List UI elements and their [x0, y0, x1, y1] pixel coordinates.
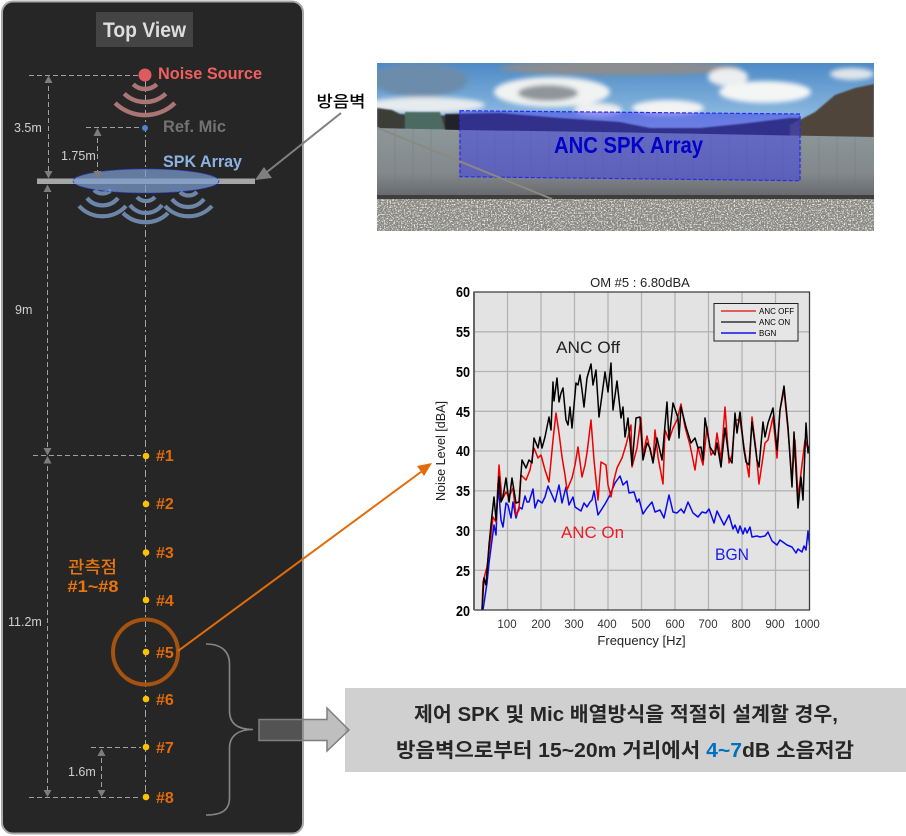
callout: conclusion box: 제어 SPK 및 Mic 배열방식을 적절히 설계할 경우,	[414, 703, 838, 726]
observation points #1 to #8: #7	[156, 740, 174, 757]
annotation: BGN: BGN	[715, 546, 749, 564]
observation points #1 to #8: #8	[156, 790, 174, 807]
chart legend	[714, 304, 798, 341]
chart: noise level versus frequency	[434, 275, 820, 648]
x-axis tick labels: 100	[497, 619, 517, 631]
x-axis tick labels: 200	[531, 619, 551, 631]
dimension: 9m: 9m	[15, 303, 32, 317]
x-axis tick labels: 700	[698, 619, 718, 631]
barrier wall	[377, 128, 874, 198]
dimension: 1.75m	[61, 128, 141, 179]
observation points #1 to #8: #5	[156, 645, 174, 662]
dimension: 3.5m	[14, 76, 141, 178]
callout line crossing photo	[377, 126, 552, 200]
dimension: 1.6m	[68, 748, 141, 797]
arrow: point #5 to chart	[178, 463, 432, 651]
series: black curve	[482, 363, 810, 610]
centre axis line	[144, 80, 146, 800]
noise barrier and SPK array ellipse	[37, 169, 255, 193]
observation points #1 to #8: #1	[156, 448, 174, 465]
chart title: OM #5 : 6.80dBA	[590, 275, 690, 290]
photo: noise barrier with ANC speaker array	[341, 61, 874, 231]
label: SPK Array: SPK Array	[163, 152, 243, 171]
icon: reference microphone	[142, 125, 148, 131]
y-axis tick labels: 30	[456, 523, 470, 540]
heading: Top View	[96, 12, 193, 47]
dimension: 1.75m: 1.75m	[61, 149, 96, 163]
x-axis tick labels: 300	[564, 619, 584, 631]
overlay: ANC SPK Array	[460, 111, 800, 181]
series: red curve	[482, 390, 809, 610]
y-axis tick labels: 35	[456, 483, 470, 500]
dimension: 11.2m: 11.2m	[8, 615, 42, 629]
y-axis tick labels: 25	[456, 563, 470, 580]
plot frame	[474, 292, 810, 610]
chart legend: ANC OFF	[759, 307, 794, 316]
y-axis tick labels: 20	[456, 603, 470, 620]
y-axis tick labels: 60	[456, 284, 470, 301]
label: ANC SPK Array: ANC SPK Array	[554, 132, 703, 158]
label: 방음벽: 방음벽	[316, 88, 366, 112]
observation points #1 to #8: #4	[156, 593, 174, 610]
dimension: 1.6m: 1.6m	[68, 765, 96, 779]
clouds	[365, 61, 874, 117]
y-axis tick labels: 40	[456, 443, 470, 460]
arrow: wall to SPK array callout	[255, 113, 341, 180]
dimension: 11.2m	[8, 456, 141, 798]
label: observation points group: 관측점	[68, 558, 117, 577]
observation points #1 to #8	[143, 448, 174, 807]
y-axis title: Noise Level [dBA]	[434, 401, 448, 501]
x-axis tick labels: 900	[765, 619, 785, 631]
sky	[377, 63, 874, 143]
heading: Top View: Top View	[103, 19, 187, 42]
x-axis tick labels: 500	[631, 619, 651, 631]
observation points #1 to #8: #6	[156, 692, 174, 709]
annotation: ANC Off: ANC Off	[556, 338, 620, 357]
label: Ref. Mic: Ref. Mic	[163, 117, 226, 136]
icon: noise source with sound waves	[115, 68, 175, 115]
y-axis tick labels: 50	[456, 364, 470, 381]
y-axis tick labels: 45	[456, 404, 470, 421]
dimension: 3.5m: 3.5m	[14, 121, 42, 135]
annotation: ANC On: ANC On	[561, 524, 624, 542]
callout: conclusion box: 방음벽으로부터 15~20m 거리에서 4~7dB 소음저감	[396, 739, 854, 762]
plot background	[474, 292, 810, 610]
panel: top view diagram	[2, 2, 303, 834]
x-axis title: Frequency [Hz]	[597, 633, 686, 648]
gravel ground	[377, 199, 874, 231]
x-axis tick labels: 600	[665, 619, 685, 631]
callout: conclusion box	[345, 688, 906, 772]
block arrow: brace to conclusion	[259, 708, 349, 751]
brace: points #5 to #8	[206, 644, 253, 815]
icon: speaker array sound waves	[79, 190, 212, 222]
observation points #1 to #8: #2	[156, 496, 174, 513]
x-axis tick labels	[497, 619, 820, 631]
label: Noise Source: Noise Source	[158, 64, 262, 83]
tree line	[377, 84, 874, 138]
chart legend: ANC ON	[759, 318, 790, 327]
y-axis tick labels: 55	[456, 324, 470, 341]
chart legend: BGN	[759, 329, 777, 338]
observation points #1 to #8: #3	[156, 545, 174, 562]
x-axis tick labels: 400	[597, 619, 617, 631]
series: BGN blue curve	[483, 476, 810, 610]
x-axis tick labels: 800	[731, 619, 751, 631]
dimension: 9m	[15, 184, 52, 456]
label: observation points group	[68, 558, 118, 596]
label: observation points group: #1~#8	[68, 577, 118, 596]
x-axis tick labels: 1000	[794, 619, 820, 631]
y-axis tick labels	[456, 284, 470, 620]
highlight circle: point #5	[113, 620, 178, 684]
